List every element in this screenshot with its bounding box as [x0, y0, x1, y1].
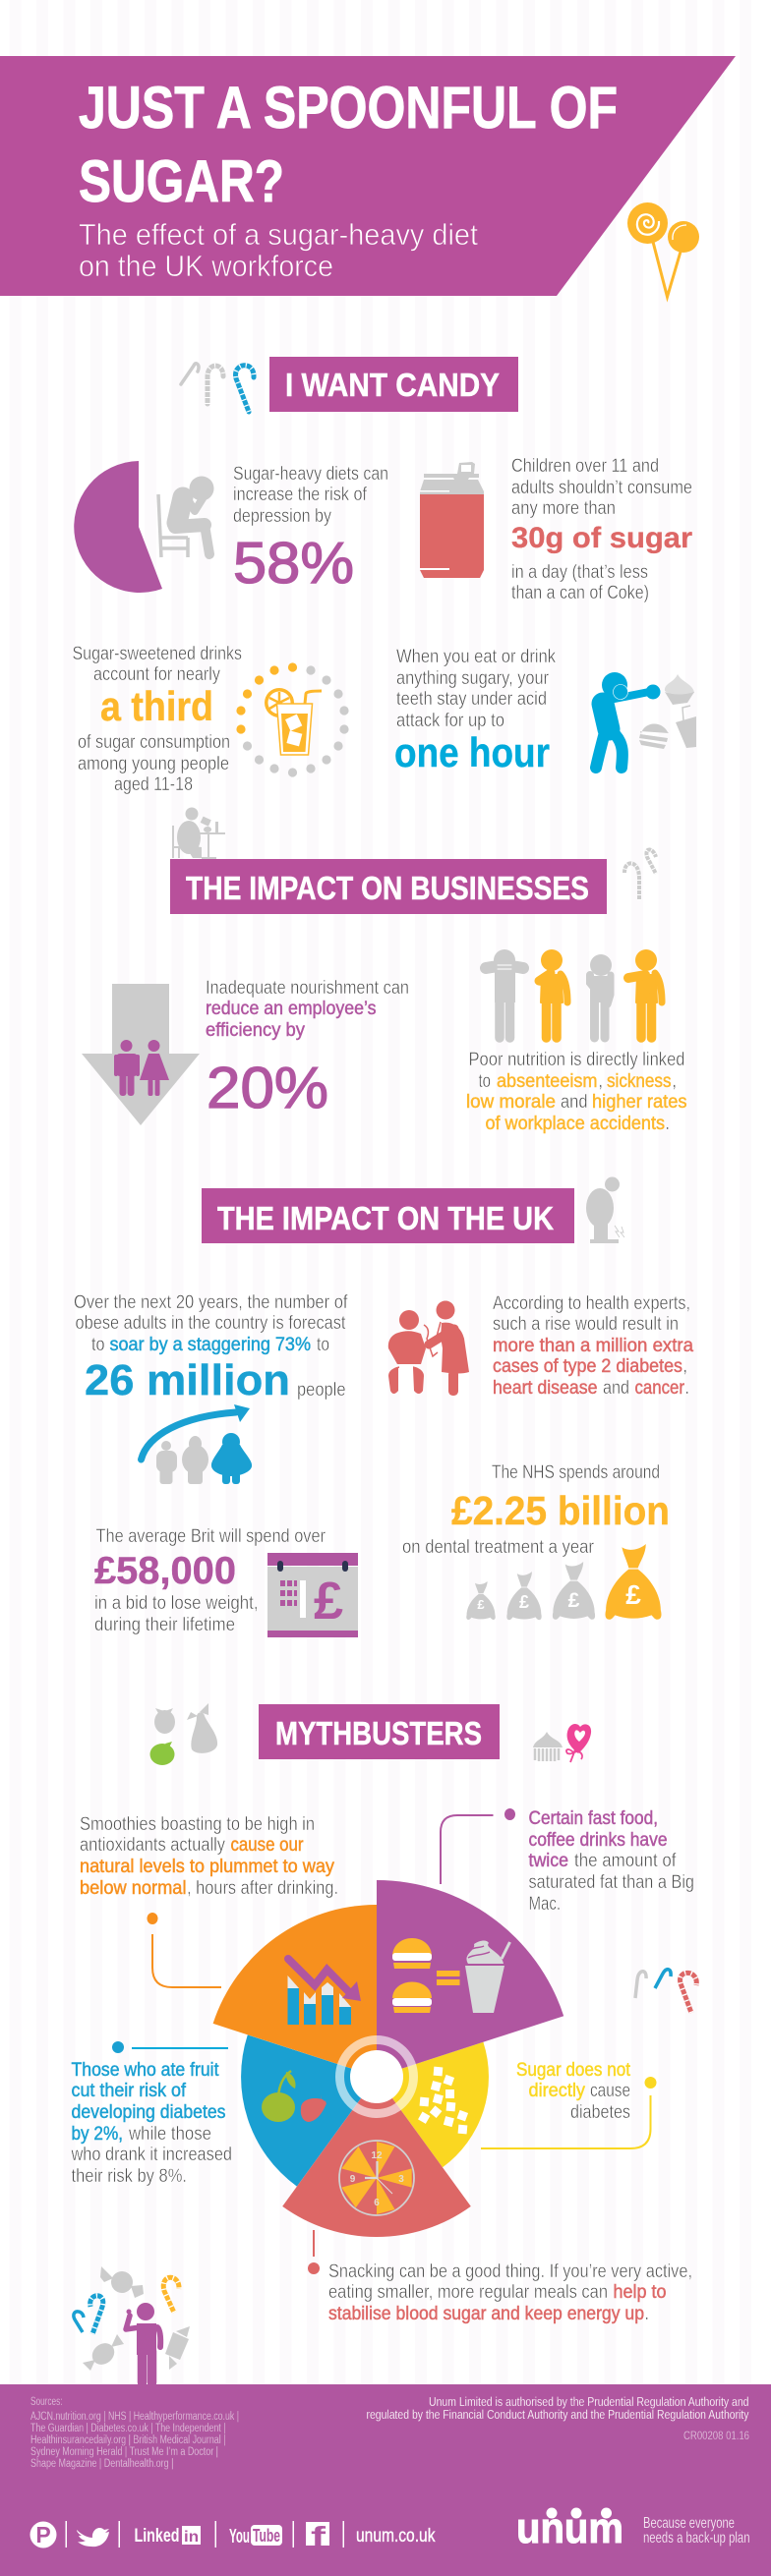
panel: health experts: cancer — [635, 1378, 685, 1399]
icon: clock — [339, 2141, 414, 2215]
panel: health experts — [388, 1293, 693, 1399]
panel: fast food myth: twice — [529, 1851, 568, 1871]
panel: smoothies myth: , hours after drinking. — [187, 1878, 338, 1899]
icon: youtube: You — [229, 2526, 250, 2547]
panel: smoothies myth: Smoothies boasting to be high in — [80, 1814, 315, 1835]
panel: obesity forecast: Over the next 20 years, the number of — [74, 1292, 348, 1313]
panel: a third: of sugar consumption — [78, 732, 230, 753]
icon: twitter — [77, 2528, 109, 2547]
icon: cupcake and heart lollipop — [533, 1724, 591, 1762]
icon: clock: 12 — [371, 2150, 383, 2161]
header banner — [0, 56, 736, 296]
panel: smoothies myth: below normal — [80, 1878, 187, 1899]
sector: blue — [241, 2034, 377, 2187]
panel: one hour: anything sugary, your — [396, 668, 550, 689]
panel: obesity forecast — [74, 1292, 348, 1484]
panel: snacking myth: eating smaller, more regular meals can — [328, 2282, 608, 2303]
icon: linkedin: Linked — [134, 2526, 179, 2547]
unum logo: Because everyone — [643, 2515, 735, 2532]
heading: the impact on the UK — [202, 1188, 574, 1243]
icon: can — [420, 462, 484, 578]
icon: calendar — [267, 1553, 358, 1637]
panel: depression stat: depression by — [233, 506, 331, 527]
icon: facebook: f — [311, 2521, 326, 2551]
panel: cost of losing weight: in a bid to lose weight, — [94, 1593, 258, 1614]
panel: 30g of sugar: in a day (that’s less — [511, 562, 648, 583]
panel: snacking myth: Snacking can be a good thing. If you’re very active, — [328, 2261, 692, 2282]
heading: the impact on businesses — [170, 859, 607, 914]
panel: a third: a third — [100, 683, 213, 729]
panel: 30g of sugar — [420, 456, 692, 603]
sector: yellow — [377, 2042, 489, 2167]
panel: fruit myth: who drank it increased — [71, 2145, 232, 2165]
canes — [74, 2277, 179, 2334]
callout leader: blue — [112, 2041, 228, 2053]
panel: snacking myth: stabilise blood sugar and keep energy up — [328, 2304, 644, 2324]
panel: one hour: When you eat or drink — [396, 647, 556, 667]
callout leader: red — [308, 2230, 320, 2274]
legal text — [366, 2395, 749, 2442]
icon: linkedin: in — [184, 2529, 199, 2546]
sources: Sources: — [30, 2396, 63, 2408]
panel: health experts: and — [603, 1378, 629, 1399]
panel: health experts: cases of type 2 diabetes — [493, 1356, 682, 1377]
panel: 30g of sugar: than a can of Coke) — [511, 583, 649, 603]
panel: obesity forecast: to — [317, 1335, 329, 1355]
panel: fast food myth: Certain fast food, — [529, 1808, 658, 1829]
panel: 30g of sugar: Children over 11 and — [511, 456, 659, 477]
icon: junk food — [639, 674, 696, 749]
sources — [30, 2396, 239, 2470]
panel: fast food myth — [441, 1808, 694, 1915]
panel: NHS dental spend: on dental treatment a year — [402, 1537, 595, 1558]
panel: efficiency: Inadequate nourishment can — [206, 978, 409, 999]
panel: depression stat: increase the risk of — [233, 485, 368, 505]
icon: glass of lemonade — [265, 688, 322, 755]
icon: down arrow with employees — [82, 984, 200, 1125]
panel: obesity forecast: people — [297, 1380, 346, 1401]
sources: Sydney Morning Herald | Trust Me I’m a Doctor | — [30, 2446, 218, 2458]
worker: grey, unwell — [590, 954, 612, 1038]
panel: cost of losing weight: £58,000 — [94, 1550, 236, 1592]
panel: NHS dental spend: £2.25 billion — [451, 1488, 670, 1533]
icon: calendar: £ — [314, 1572, 343, 1631]
panel: smoothies myth: cause our — [230, 1835, 304, 1856]
worker: orange with drink — [628, 949, 662, 1038]
panel: 30g of sugar: 30g of sugar — [511, 522, 692, 554]
panel: fruit myth: developing diabetes — [71, 2102, 226, 2123]
panel: fruit myth: cut their risk of — [71, 2081, 187, 2101]
panel: poor nutrition: , — [598, 1071, 603, 1092]
panel: fast food myth: coffee drinks have — [529, 1830, 667, 1851]
pie chart 58% — [74, 461, 162, 593]
heading: I want candy — [269, 357, 518, 412]
panel: health experts: heart disease — [493, 1378, 598, 1399]
callout leader: yellow — [481, 2077, 657, 2148]
panel: health experts: , — [682, 1356, 687, 1377]
icon: three growing figures — [156, 1433, 252, 1484]
heading: I want candy: I WANT CANDY — [285, 367, 500, 403]
number 26 million: 26 million — [85, 1356, 290, 1404]
website link: unum.co.uk — [356, 2526, 436, 2547]
sources: The Guardian | Diabetes.co.uk | The Independent | — [30, 2423, 226, 2434]
text: Sugar-heavy diets can — [233, 464, 388, 485]
title — [79, 75, 618, 214]
panel: NHS dental spend — [402, 1462, 670, 1620]
icon: clock: 9 — [350, 2174, 356, 2185]
panel: a third: Sugar-sweetened drinks — [73, 644, 242, 664]
icon: pinterest — [30, 2522, 57, 2547]
icon: money bags: £ — [477, 1597, 485, 1612]
panel: poor nutrition: higher rates — [592, 1092, 686, 1113]
panel: sugar myth — [481, 2060, 657, 2148]
unum logo: unum — [516, 2504, 623, 2552]
subtitle: The effect of a sugar-heavy diet — [79, 217, 478, 252]
icon: four workers — [486, 949, 662, 1038]
icon: sad seated person — [158, 476, 214, 557]
panel: fruit myth: while those — [128, 2124, 211, 2145]
sources: Healthinsurancedaily.org | British Medical Journal | — [30, 2434, 226, 2446]
arrow: rising curve — [142, 1404, 250, 1460]
panel: sugar myth: Sugar does not — [516, 2060, 631, 2081]
panel: smoothies myth: natural levels to plummet to way — [80, 1857, 334, 1877]
panel: obesity forecast: obese adults in the country is forecast — [75, 1313, 346, 1334]
icon: burgers equal shake — [392, 1938, 509, 2013]
heading: the impact on businesses: THE IMPACT ON BUSINESSES — [186, 870, 589, 906]
heading: mythbusters: MYTHBUSTERS — [275, 1715, 482, 1751]
panel: a third — [73, 644, 349, 795]
panel: fast food myth: Mac. — [529, 1894, 561, 1915]
icon: facebook — [306, 2521, 329, 2551]
panel: obesity forecast: soar by a staggering 73% — [110, 1335, 311, 1355]
panel: efficiency — [82, 978, 409, 1125]
panel: snacking myth: . — [644, 2304, 649, 2324]
icon: person eating at table — [173, 808, 225, 858]
panel: poor nutrition: . — [665, 1114, 670, 1134]
icon: candy canes — [181, 364, 254, 412]
sources: AJCN.nutrition.org | NHS | Healthyperformance.co.uk | — [30, 2411, 239, 2423]
worker: grey, hands on head — [486, 949, 523, 1038]
panel: one hour — [394, 647, 696, 775]
callout leader: orange — [148, 1913, 221, 1987]
title: SUGAR? — [79, 148, 284, 214]
icon: overweight person on scale — [586, 1177, 624, 1243]
panel: health experts: . — [684, 1378, 689, 1399]
icon: pinterest: P — [35, 2522, 51, 2547]
sector: purple — [377, 1880, 563, 2077]
panel: a third: among young people — [78, 754, 229, 774]
icon: clock: 6 — [374, 2198, 380, 2208]
panel: poor nutrition: of workplace accidents — [486, 1114, 665, 1134]
footer — [0, 2384, 771, 2576]
panel: depression stat — [74, 461, 388, 596]
panel: one hour: one hour — [394, 729, 550, 775]
subtitle: on the UK workforce — [79, 249, 333, 283]
panel: smoothies myth: antioxidants actually — [80, 1835, 225, 1856]
sources: Shape Magazine | Dentalhealth.org | — [30, 2458, 173, 2470]
panel: fast food myth: saturated fat than a Big — [529, 1872, 694, 1893]
panel: efficiency: efficiency by — [206, 1020, 305, 1041]
panel: snacking myth — [308, 2230, 692, 2324]
hub ring — [340, 2040, 413, 2113]
icon: money bags: £ — [625, 1579, 641, 1610]
panel: one hour: attack for up to — [396, 711, 504, 731]
worker: orange with burger — [539, 949, 567, 1038]
panel: sugar myth: cause — [590, 2081, 630, 2101]
panel: 30g of sugar: any more than — [511, 498, 616, 519]
icon: sugar cubes — [418, 2067, 468, 2134]
number 20%: 20% — [207, 1056, 328, 1120]
icon: lollipops — [627, 202, 699, 297]
heading: mythbusters — [259, 1704, 500, 1759]
icon: youtube: Tube — [253, 2526, 280, 2546]
legal text: CR00208 01.16 — [683, 2431, 749, 2442]
panel: health experts: such a rise would result in — [493, 1314, 679, 1335]
number 58%: 58% — [233, 531, 354, 596]
panel: efficiency: reduce an employee’s — [206, 999, 376, 1019]
icon: doctor and patient — [388, 1301, 469, 1396]
panel: poor nutrition: and — [561, 1092, 588, 1113]
icon: cherry and strawberry — [262, 2071, 326, 2122]
icon: grey canes — [624, 849, 656, 900]
panel: poor nutrition — [466, 949, 686, 1134]
panel: poor nutrition: to — [478, 1071, 491, 1092]
panel: health experts: According to health experts, — [493, 1293, 690, 1314]
panel: NHS dental spend: The NHS spends around — [492, 1462, 660, 1483]
callout leader: purple — [441, 1808, 515, 1884]
icon: boxing figure — [596, 672, 661, 768]
panel: fruit myth: their risk by 8%. — [71, 2166, 187, 2187]
title: JUST A SPOONFUL OF — [79, 75, 618, 141]
panel: smoothies myth — [80, 1814, 338, 1987]
panel: sugar myth: diabetes — [570, 2102, 630, 2123]
panel: fruit myth: Those who ate fruit — [71, 2060, 219, 2081]
panel: poor nutrition: absenteeism — [497, 1071, 598, 1092]
icon: money bags — [466, 1544, 661, 1620]
panel: cost of losing weight: The average Brit will spend over — [96, 1526, 326, 1547]
panel: 30g of sugar: adults shouldn’t consume — [511, 478, 692, 498]
subtitle — [79, 217, 478, 283]
panel: cost of losing weight: during their lifetime — [94, 1615, 235, 1635]
icon: money bags: £ — [568, 1589, 580, 1612]
unum logo — [516, 2504, 749, 2552]
panel: sugar myth: directly — [529, 2081, 585, 2101]
panel: poor nutrition: low morale — [466, 1092, 556, 1113]
icon: three canes — [635, 1970, 696, 2013]
candy: wrapped sweets — [83, 2266, 190, 2371]
sector: red — [282, 2077, 471, 2237]
icon: person surrounded by sweets — [74, 2266, 190, 2382]
panel: obesity forecast: to — [91, 1335, 104, 1355]
panel: fruit myth: by 2%, — [71, 2124, 123, 2145]
panel: poor nutrition: sickness — [607, 1071, 671, 1092]
panel: cost of losing weight — [94, 1526, 358, 1637]
figure — [126, 2303, 160, 2382]
icon: youtube — [229, 2525, 282, 2547]
icon: fruit — [149, 1703, 217, 1765]
panel: poor nutrition: , — [672, 1071, 677, 1092]
icon: falling bar chart — [287, 1959, 361, 2025]
icon: ring of dots — [236, 662, 349, 777]
icon: clock: 3 — [398, 2174, 404, 2185]
icon: money bags: £ — [519, 1592, 529, 1612]
panel: one hour: teeth stay under acid — [396, 689, 547, 710]
social icons — [30, 2521, 436, 2551]
panel: fruit myth — [71, 2041, 232, 2187]
heading: the impact on the UK: THE IMPACT ON THE UK — [217, 1200, 554, 1236]
panel: health experts: more than a million extra — [493, 1336, 693, 1356]
panel: poor nutrition: Poor nutrition is directly linked — [468, 1050, 684, 1070]
panel: a third: account for nearly — [93, 664, 220, 685]
panel: a third: aged 11-18 — [114, 774, 193, 795]
pie wheel: myths — [213, 1880, 563, 2237]
panel: fast food myth: the amount of — [574, 1851, 677, 1871]
panel: snacking myth: help to — [614, 2282, 667, 2303]
sector: orange — [213, 1905, 377, 2077]
